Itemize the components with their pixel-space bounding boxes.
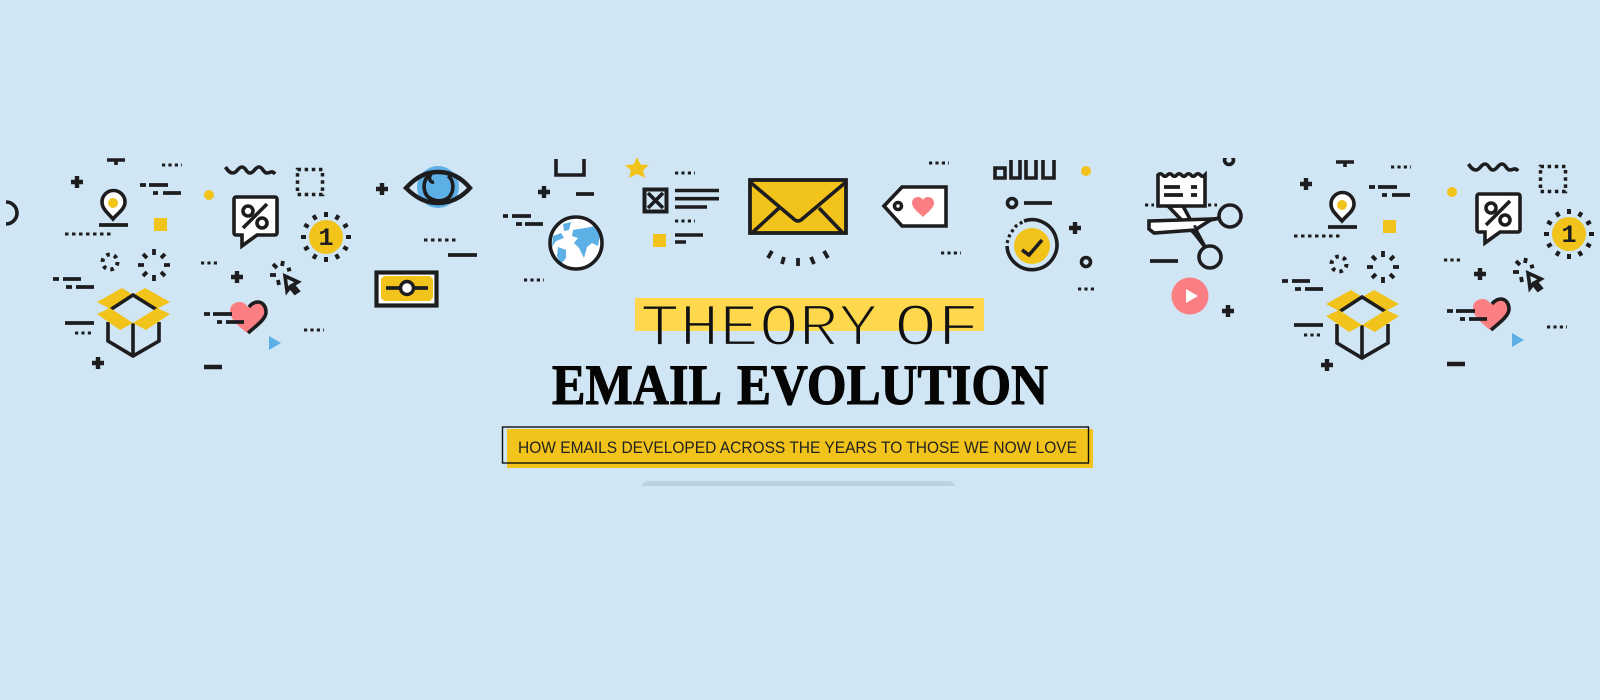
icon: number one badge — [301, 212, 351, 262]
icon: cursor click — [1513, 258, 1541, 290]
dotted line — [75, 332, 91, 334]
group: sale icons, right — [1444, 164, 1594, 364]
title: theory of: THEORY — [640, 296, 878, 364]
icon: radial loading ring — [1367, 251, 1399, 283]
dotted line — [929, 162, 949, 164]
dotted line — [1294, 234, 1342, 238]
minus — [576, 192, 594, 196]
icon: plus — [1300, 178, 1312, 190]
dotted line — [424, 238, 458, 242]
dotted line — [201, 262, 217, 264]
icon: plus — [1069, 222, 1081, 234]
icon: open box — [97, 288, 170, 356]
icon: open box — [1326, 290, 1399, 358]
dotted line — [675, 220, 695, 222]
icon: number one badge: 1 — [1561, 221, 1577, 250]
yellow dot — [204, 190, 214, 200]
icon: small dotted ring — [102, 254, 118, 270]
icon: number one badge: 1 — [318, 224, 334, 253]
yellow square — [653, 234, 666, 247]
icon: globe — [550, 217, 602, 269]
wave — [1468, 164, 1518, 171]
icon: cropped cup — [556, 159, 584, 175]
dotted line — [675, 172, 695, 174]
icon: heart — [204, 302, 266, 333]
lines — [675, 235, 703, 242]
yellow square — [154, 218, 167, 231]
lines — [65, 321, 94, 325]
title: email evolution: EVOLUTION — [737, 354, 1048, 417]
line — [1150, 259, 1178, 263]
icon: money ticket — [376, 272, 436, 306]
dotted line — [65, 232, 113, 236]
dotted line — [1304, 334, 1323, 336]
icon: ring and line — [1008, 198, 1052, 208]
title highlight — [635, 298, 984, 331]
subtitle banner — [502, 427, 1093, 468]
icon: play button — [1172, 278, 1208, 314]
icon: document list — [644, 190, 719, 212]
icon: plus — [1474, 268, 1486, 280]
icon: plus — [376, 183, 388, 195]
group: pin and box icons, left — [53, 160, 182, 369]
icon: plus — [92, 357, 104, 369]
icon: envelope rays — [768, 251, 828, 266]
yellow square — [1383, 220, 1396, 233]
icon strip — [6, 156, 1594, 371]
wave — [226, 167, 275, 174]
dotted line — [1078, 288, 1097, 290]
banner fill — [507, 429, 1093, 468]
icon: map pin — [99, 190, 128, 225]
icon: number one badge — [1544, 209, 1594, 259]
icon: heart — [1447, 299, 1509, 330]
icon: eye — [406, 166, 470, 208]
icon: cropped T shape — [107, 160, 125, 165]
dashes — [1369, 187, 1410, 195]
minus — [204, 365, 222, 369]
icon: plus — [1222, 305, 1234, 317]
blue triangle — [1512, 333, 1524, 347]
icon: plus — [1321, 359, 1333, 371]
dotted line — [304, 328, 324, 332]
title: email evolution — [552, 354, 1048, 417]
group: pin and box icons, right — [1282, 162, 1411, 371]
ring — [1082, 258, 1090, 266]
dotted line — [941, 252, 961, 254]
dotted line — [1547, 326, 1567, 328]
line — [448, 253, 477, 257]
dotted line — [1444, 258, 1463, 262]
title: theory of — [640, 296, 980, 364]
dotted line — [524, 278, 544, 282]
icon: cropped T shape — [1336, 162, 1354, 167]
cropped ring — [1224, 156, 1234, 164]
dashed square — [298, 170, 322, 194]
yellow dot — [1081, 166, 1091, 176]
dashes — [53, 279, 94, 287]
icon: cursor click — [270, 261, 298, 293]
dotted line — [1391, 166, 1411, 168]
icon: heart tag — [884, 187, 946, 226]
icon: cropped circle at left edge — [6, 202, 17, 224]
icon: check badge — [1007, 220, 1057, 270]
dashes — [503, 216, 543, 224]
title: email evolution: EMAIL — [552, 354, 722, 417]
icon: plus — [231, 271, 243, 283]
subtitle: HOW EMAILS DEVELOPED ACROSS THE YEARS TO THOSE WE NOW LOVE — [518, 439, 1077, 457]
grey shadow bar — [642, 481, 955, 486]
dotted line — [162, 164, 182, 166]
minus — [1447, 362, 1465, 366]
blue triangle — [269, 336, 281, 350]
icon: percent speech bubble — [1477, 194, 1520, 243]
dashes — [140, 185, 181, 193]
icon: star — [625, 157, 649, 178]
icon: envelope — [750, 180, 846, 233]
dashes — [1282, 281, 1323, 289]
icon: bars row — [995, 160, 1054, 178]
icon: map pin — [1328, 192, 1357, 227]
icon: percent speech bubble — [234, 197, 277, 246]
icon: plus — [538, 186, 550, 198]
dashed square — [1540, 166, 1566, 192]
title: theory of: OF — [894, 296, 980, 364]
icon: plus — [71, 176, 83, 188]
icon: scissors cutting coupon — [1145, 174, 1241, 268]
group: sale icons, left — [201, 167, 351, 367]
icon: small dotted ring — [1332, 256, 1346, 272]
icon: radial loading ring — [138, 249, 170, 281]
banner outline — [502, 427, 1088, 463]
lines — [1294, 323, 1323, 327]
yellow dot — [1447, 187, 1457, 197]
